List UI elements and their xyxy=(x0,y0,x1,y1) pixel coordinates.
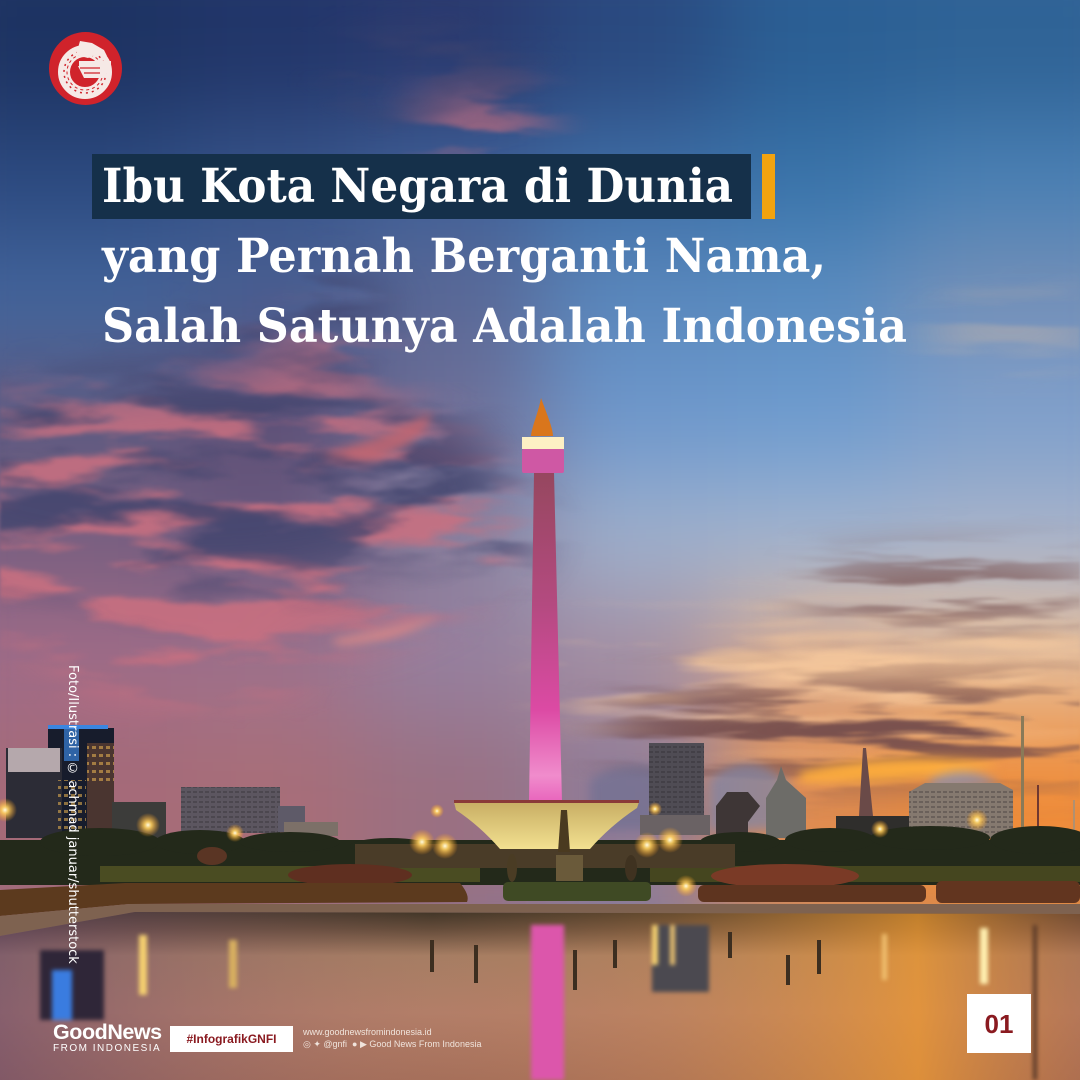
footer brand: GoodNews: GoodNews xyxy=(53,1020,162,1044)
footer brand: GoodNews: FROM INDONESIA xyxy=(53,1043,161,1054)
title line 2: yang Pernah Berganti Nama, xyxy=(101,229,826,284)
photo credit: Foto/Ilustrasi : © achmad januar/shutterstock xyxy=(65,665,80,964)
title block xyxy=(92,154,907,354)
title line 3: Salah Satunya Adalah Indonesia xyxy=(102,299,907,354)
title line 1: Ibu Kota Negara di Dunia xyxy=(102,159,733,214)
title accent bar xyxy=(762,154,775,219)
clouds xyxy=(0,46,1080,834)
title highlight bar xyxy=(92,154,751,219)
distant skyline right xyxy=(640,716,1075,876)
hashtag badge xyxy=(170,1026,293,1052)
footer website and social handles: www.goodnewsfromindonesia.id xyxy=(303,1027,432,1037)
monument flame xyxy=(531,398,553,436)
footer website and social handles xyxy=(303,1027,482,1049)
statue xyxy=(558,810,570,852)
trees and park xyxy=(0,826,1080,888)
page number badge xyxy=(967,994,1031,1053)
distant skyline left xyxy=(6,725,338,840)
pool edge xyxy=(0,904,1080,936)
monument top platform xyxy=(522,437,564,449)
reflecting pool xyxy=(0,912,1080,1080)
Monas monument xyxy=(454,398,639,882)
monument cup base xyxy=(454,802,639,849)
monument shaft xyxy=(529,473,562,802)
footer website and social handles: ◎ ✦ @gnfi ● ▶ Good News From Indonesia xyxy=(303,1039,481,1049)
hedges xyxy=(0,881,1080,916)
logo: GNFI garuda badge xyxy=(49,32,122,105)
street lights xyxy=(0,798,988,897)
page number badge: 01 xyxy=(985,1009,1013,1039)
hashtag badge: #InfografikGNFI xyxy=(186,1032,276,1046)
